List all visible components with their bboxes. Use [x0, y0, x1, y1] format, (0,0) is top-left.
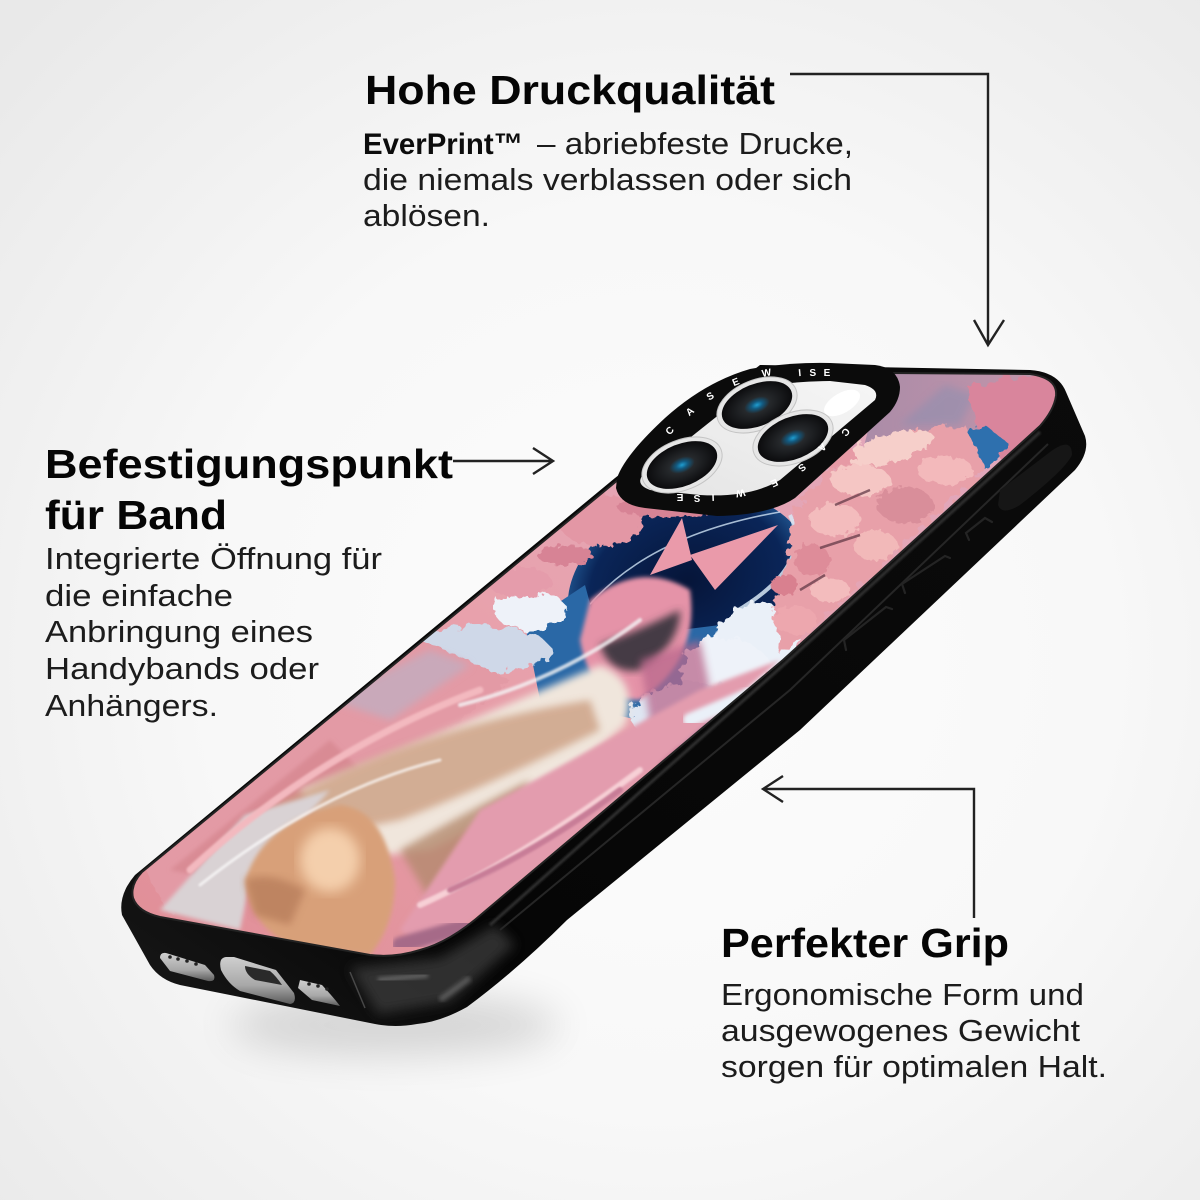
camera frame: [616, 363, 900, 516]
description: Ergonomische Form und: [721, 977, 1084, 1012]
brand text bottom: S: [795, 461, 808, 473]
pale drapery lower left: [160, 790, 330, 930]
blossom branches left: [488, 494, 713, 597]
side bevel line: [500, 444, 1048, 930]
warm diagonal band: [282, 696, 603, 828]
description: [363, 126, 853, 233]
brand text top: A: [684, 406, 697, 419]
arrow: perfect grip: [763, 776, 974, 918]
phone case: [120, 360, 1086, 1026]
description: EverPrint™: [363, 128, 523, 161]
description: – abriebfeste Drucke,: [537, 126, 853, 161]
art base wash: [133, 432, 1007, 955]
arrow: strap attachment: [453, 448, 553, 474]
brand text top: E: [731, 376, 742, 389]
camera glass: [640, 381, 876, 495]
blossom tree right: [771, 423, 985, 655]
usb opening: [245, 966, 282, 985]
heading: Befestigungspunkt: [45, 441, 453, 487]
brand text top: I: [798, 368, 802, 379]
heading: Hohe Druckqualität: [365, 67, 775, 113]
charging port and speakers: [160, 953, 340, 1006]
description: sorgen für optimalen Halt.: [721, 1049, 1107, 1084]
pink cloud top right: [970, 376, 1060, 462]
left speaker: [160, 953, 214, 981]
side switch: [998, 445, 1072, 510]
brand text bottom: C: [838, 425, 851, 438]
brand text bottom: W: [734, 486, 746, 499]
moon and night sky: [568, 508, 794, 629]
bottom corner highlights: [350, 432, 1048, 1014]
description: Integrierte Öffnung für: [45, 541, 382, 576]
brand text top: S: [705, 390, 717, 403]
brand text top: E: [824, 368, 831, 379]
brand text bottom: S: [693, 492, 700, 503]
description: [721, 977, 1107, 1084]
pale drapery band: [300, 665, 629, 860]
description: ausgewogenes Gewicht: [721, 1013, 1080, 1048]
lens left: [634, 426, 730, 504]
camera island: [616, 363, 900, 516]
description: Anhängers.: [45, 688, 218, 723]
upper-left flowing colour: [145, 640, 510, 915]
case artwork: [120, 360, 1070, 970]
callout: strap attachment: [45, 441, 453, 723]
left speaker holes: [168, 955, 198, 966]
heading: [45, 441, 453, 538]
blue sky patch: [968, 426, 1008, 469]
description: die niemals verblassen oder sich: [363, 162, 852, 197]
arrow: print quality: [790, 74, 1004, 345]
brand text top: S: [809, 368, 817, 379]
description: Anbringung eines: [45, 614, 313, 649]
upper sky: [864, 374, 1034, 448]
callout: perfect grip: [721, 920, 1107, 1084]
lens right: [745, 399, 841, 477]
brand text top: W: [761, 367, 773, 380]
lower right streaks: [400, 660, 780, 950]
brand text top: C: [664, 425, 677, 438]
description: ablösen.: [363, 198, 490, 233]
brand text bottom: I: [711, 491, 715, 502]
side buttons: [844, 518, 992, 650]
warm lower glow: [245, 805, 395, 955]
clouds: [423, 592, 800, 730]
brand text top: [664, 367, 831, 438]
pink central mass: [580, 577, 691, 700]
usb port: [220, 957, 295, 1004]
case body: [121, 365, 1086, 1026]
blue lower sky: [526, 585, 718, 718]
screen rim: [132, 372, 1056, 956]
brand text bottom: E: [768, 476, 779, 489]
brand text bottom: A: [815, 440, 828, 453]
description: die einfache: [45, 578, 233, 613]
phone shadow: [230, 995, 560, 1055]
heading: Perfekter Grip: [721, 920, 1009, 966]
heading: für Band: [45, 492, 227, 538]
brand text bottom: [676, 425, 851, 503]
brand text bottom: E: [676, 491, 683, 502]
description: [45, 541, 382, 723]
flash: [820, 384, 864, 422]
right speaker: [298, 980, 340, 1006]
description: Handybands oder: [45, 651, 319, 686]
right speaker holes: [307, 982, 329, 991]
callout: print quality: [363, 67, 853, 233]
lens top: [709, 366, 805, 444]
